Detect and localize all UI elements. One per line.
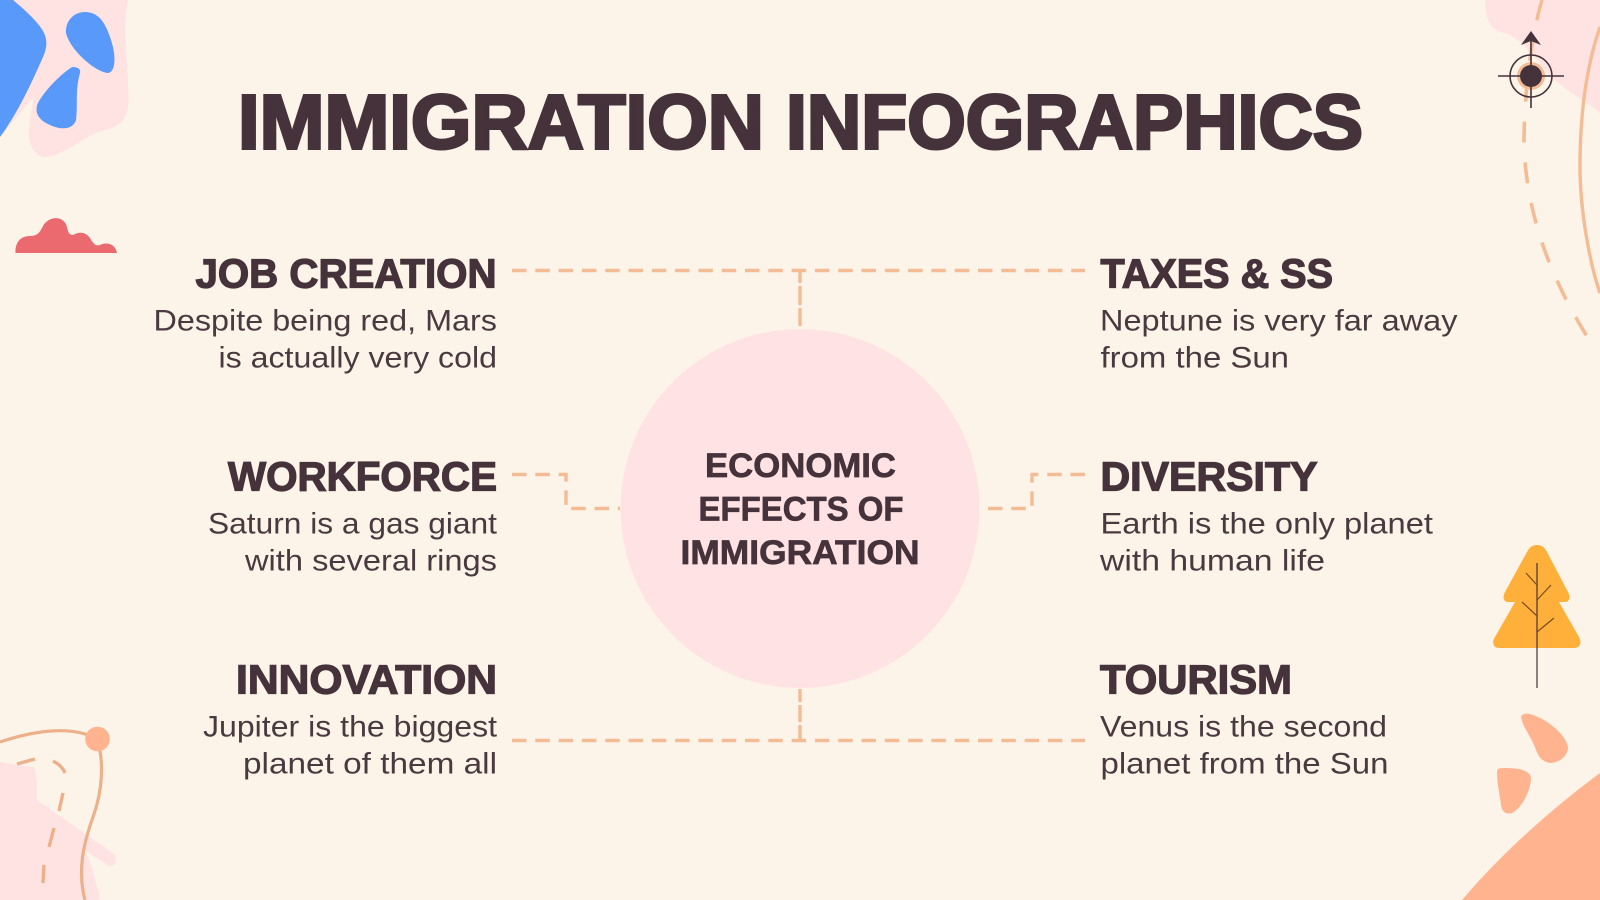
icon: yellow tree xyxy=(1493,545,1580,688)
block: innovation: planet of them all xyxy=(243,748,497,780)
decoration: top-left blobs xyxy=(0,0,129,157)
decoration: red cloud xyxy=(15,218,117,253)
block: tourism: TOURISM xyxy=(1100,656,1292,702)
block: tourism: Venus is the second xyxy=(1100,710,1387,744)
block: innovation: Jupiter is the biggest xyxy=(203,710,498,744)
block: tourism: planet from the Sun xyxy=(1100,748,1388,780)
block: innovation xyxy=(203,656,498,780)
central circle xyxy=(620,329,980,688)
central label xyxy=(680,447,920,572)
block: job creation: Despite being red, Mars xyxy=(154,304,497,338)
title xyxy=(238,80,1363,166)
block: diversity xyxy=(1099,454,1434,578)
block: workforce: WORKFORCE xyxy=(228,454,497,500)
central label: IMMIGRATION xyxy=(680,534,920,572)
title: INFOGRAPHICS xyxy=(786,80,1363,166)
central label: EFFECTS OF xyxy=(698,490,904,528)
block: taxes and ss: from the Sun xyxy=(1100,342,1289,374)
block: taxes and ss: TAXES & SS xyxy=(1100,250,1333,296)
block: diversity: DIVERSITY xyxy=(1100,454,1318,500)
block: diversity: Earth is the only planet xyxy=(1100,508,1434,540)
central label: ECONOMIC xyxy=(705,447,896,485)
block: taxes and ss xyxy=(1100,250,1458,374)
block: workforce: with several rings xyxy=(244,544,497,578)
block: diversity: with human life xyxy=(1099,544,1325,578)
decoration: top-right pink blob and route lines xyxy=(1485,0,1600,338)
block: workforce: Saturn is a gas giant xyxy=(208,508,498,540)
block: tourism xyxy=(1100,656,1388,780)
block: job creation xyxy=(154,250,497,374)
block: job creation: JOB CREATION xyxy=(196,250,496,296)
title: IMMIGRATION xyxy=(238,80,764,166)
block: job creation: is actually very cold xyxy=(218,342,497,374)
block: workforce xyxy=(208,454,498,578)
block: taxes and ss: Neptune is very far away xyxy=(1100,304,1458,338)
decoration: orange petals and corner xyxy=(1462,714,1600,900)
block: innovation: INNOVATION xyxy=(236,656,497,702)
decoration: bottom-left blob with route xyxy=(0,727,116,900)
dashed connectors xyxy=(512,270,1085,740)
icon: compass target with arrow xyxy=(1498,31,1564,108)
